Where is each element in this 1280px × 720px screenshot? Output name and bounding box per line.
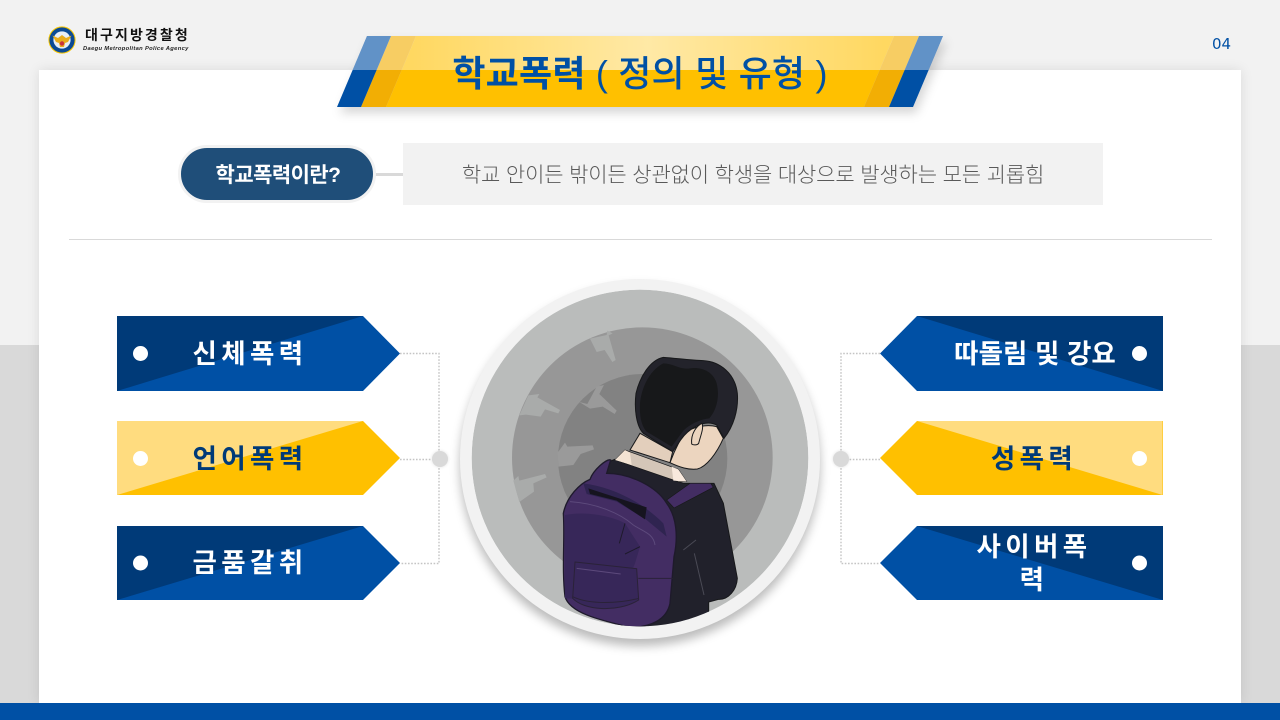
tag: cyber violence	[880, 526, 1163, 600]
label	[976, 532, 1092, 595]
definition row	[178, 143, 1103, 205]
backpack	[563, 460, 676, 627]
divider	[69, 239, 1212, 240]
label: 사이버폭	[976, 532, 1092, 562]
tag: sexual violence	[880, 421, 1163, 495]
center illustration: student surrounded by pointing hands	[460, 279, 820, 639]
pill: what is school violence	[178, 145, 376, 203]
connector line	[374, 173, 404, 176]
footer bar	[0, 703, 1280, 720]
page number: 04	[1212, 35, 1231, 53]
background lower band	[0, 345, 1280, 720]
icon: police emblem	[48, 26, 76, 54]
tag: verbal violence	[117, 421, 400, 495]
logo: Daegu Metropolitan Police Agency	[48, 26, 190, 54]
backpack pocket	[573, 562, 639, 609]
pointing hands	[513, 331, 617, 502]
logo name: 대구지방경찰청	[85, 27, 190, 43]
face	[670, 426, 723, 469]
neck	[630, 433, 673, 463]
tag: extortion	[117, 526, 400, 600]
tag: physical violence	[117, 316, 400, 391]
connector lines	[400, 352, 880, 564]
ear	[692, 423, 703, 445]
backpack zipper	[583, 483, 667, 537]
jacket	[608, 458, 738, 626]
label: 력	[1020, 565, 1048, 595]
backpack strap	[667, 483, 713, 508]
connector node left	[432, 451, 448, 467]
label: 금품갈취	[192, 548, 308, 578]
title text: 학교폭력 ( 정의 및 유형 )	[452, 53, 828, 94]
banner shape	[337, 36, 947, 117]
collar	[615, 450, 687, 482]
pill: what is school violence: 학교폭력이란?	[216, 164, 340, 187]
label: 따돌림 및 강요	[954, 339, 1116, 369]
label: 신체폭력	[192, 339, 308, 369]
connector node right	[833, 451, 849, 467]
tag: bullying and coercion	[880, 316, 1163, 391]
hair	[635, 357, 738, 452]
label: 언어폭력	[192, 444, 308, 474]
logo english name: Daegu Metropolitan Police Agency	[83, 46, 189, 52]
illustration	[472, 290, 808, 626]
definition text box: 학교 안이든 밖이든 상관없이 학생을 대상으로 발생하는 모든 괴롭힘	[462, 164, 1044, 187]
label: 성폭력	[991, 444, 1077, 474]
title banner	[337, 36, 947, 117]
definition text box	[403, 143, 1103, 205]
